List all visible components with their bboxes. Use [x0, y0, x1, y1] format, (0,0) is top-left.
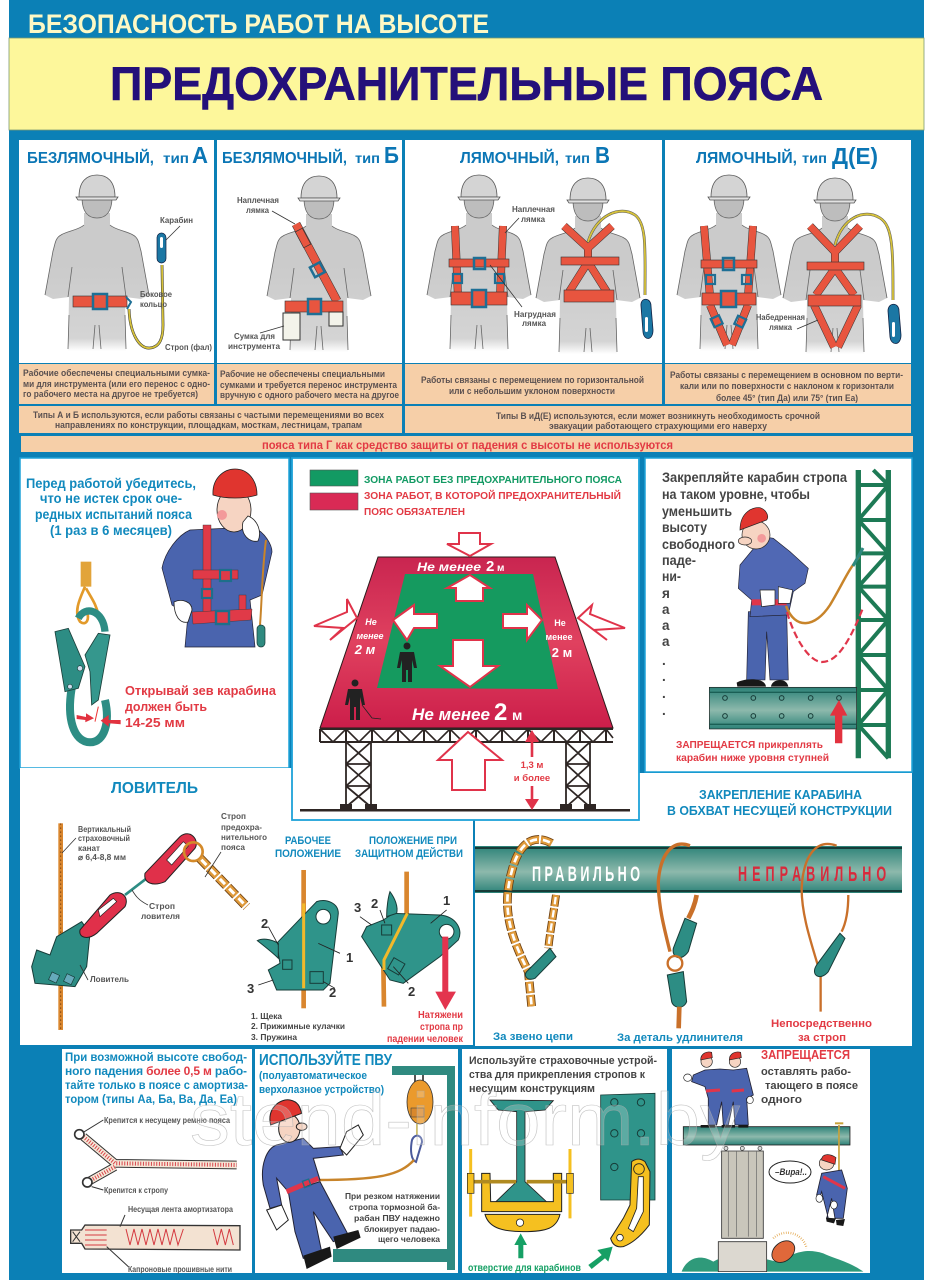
text: anchor level: а: [662, 618, 670, 633]
beam: ПРАВИЛЬНО: [532, 862, 640, 886]
device numbers: 2: [329, 985, 336, 1000]
labels: minimum 2 m: Не менее: [412, 705, 490, 724]
description boxes row 1: ми для инструмента (или его перенос с одно-: [23, 379, 210, 390]
falling worker: [262, 1100, 363, 1269]
labels: catcher diagram: страховочный: [78, 834, 130, 843]
text: safety devices: ства для прикрепления стропов к: [469, 1069, 645, 1081]
text: inspection reminder: Перед работой убедитесь,: [26, 476, 196, 491]
title band: ПРЕДОХРАНИТЕЛЬНЫЕ ПОЯСА: [110, 57, 823, 110]
legend: device parts: 2. Прижимные кулачки: [251, 1022, 345, 1031]
heading: type B: БЕЗЛЯМОЧНЫЙ,: [222, 149, 347, 167]
labels: absorber: [104, 1116, 234, 1274]
panel: use PVU: [255, 1049, 458, 1273]
icons: people in zones: [345, 642, 417, 720]
text: shock absorber: ного падения более 0,5 м рабо-: [65, 1064, 247, 1078]
diagram: protective position device: [360, 872, 460, 1010]
panel: type V: [405, 140, 662, 363]
labels: minimum 2 m: [354, 558, 573, 726]
heading: working position: ПОЛОЖЕНИЕ: [275, 848, 341, 860]
labels: type A: Строп (фал): [165, 343, 212, 352]
legend: device parts: [251, 1012, 345, 1042]
text: PVU braking: блокирует падаю-: [364, 1224, 440, 1234]
text: do not leave alone: ЗАПРЕЩАЕТСЯ: [761, 1048, 850, 1062]
description boxes row 2: эвакуации работающего страхующими его наверху: [549, 421, 768, 432]
text: PVU braking: щего человека: [378, 1234, 440, 1244]
labels: catcher diagram: нительного: [221, 833, 267, 842]
text: anchor level: уменьшить: [662, 504, 732, 519]
labels: type A: Карабин: [160, 216, 193, 225]
heading: type D(E): Д(Е): [832, 143, 878, 169]
text: carabiner gap: [125, 683, 277, 730]
labels: minimum 2 m: Не менее: [417, 560, 481, 574]
text: shock absorber: [65, 1050, 248, 1106]
text: inspection reminder: редных испытаний пояса: [35, 507, 192, 522]
legend: zones: ЗОНА РАБОТ, В КОТОРОЙ ПРЕДОХРАНИТЕЛЬНЫЙ: [364, 489, 621, 502]
labels: catcher diagram: Строп: [221, 812, 246, 821]
text: do not leave alone: тающего в поясе: [765, 1080, 858, 1092]
heading: type V: [460, 142, 610, 168]
heading: protective position: [355, 835, 463, 860]
watermark: stend-inform.by: [190, 1078, 740, 1161]
text: inspection reminder: [26, 476, 196, 538]
panel: type B: [217, 140, 402, 363]
text: anchor level: ни-: [662, 569, 681, 584]
captions: attachment: за строп: [798, 1032, 846, 1044]
dimension: height 1.3 m: и более: [514, 773, 550, 784]
worker standing on beam: [737, 508, 808, 687]
front figure with harness: [427, 175, 531, 351]
labels: catcher diagram: предохра-: [221, 823, 262, 832]
text: shock absorber: тайте только в поясе с амортиза-: [65, 1078, 248, 1092]
labels: minimum 2 m: м: [512, 707, 522, 723]
text: PVU braking: рабан ПВУ надежно: [354, 1213, 440, 1223]
heading: type A: А: [192, 142, 208, 168]
text: anchor level: паде-: [662, 553, 696, 568]
labels: type V: Нагрудная: [514, 310, 556, 319]
panel: type A: [19, 140, 214, 363]
back figure with harness and lanyard: [536, 178, 653, 354]
device numbers: 1: [346, 950, 353, 965]
subheading: PVU: верхолазное устройство): [259, 1084, 384, 1096]
text: shock absorber: тором (типы Аа, Ба, Ва, Да, Еа): [65, 1092, 237, 1106]
tower and beam: [709, 470, 888, 758]
heading: type V: ЛЯМОЧНЫЙ,: [460, 149, 559, 167]
description boxes row 1: более 45° (тип Да) или 75° (тип Еа): [716, 393, 858, 404]
caption: carabiner holes: отверстие для карабинов: [468, 1262, 581, 1274]
text: anchor level: Закрепляйте карабин стропа: [662, 470, 847, 485]
title band: [9, 38, 924, 130]
text: PVU braking: [345, 1191, 440, 1244]
panel: inspection reminder: [20, 458, 289, 768]
text: carabiner gap: 14-25 мм: [125, 715, 185, 730]
labels: type V: лямка: [521, 215, 546, 224]
description boxes row 2: Типы В иД(Е) используются, если может возникнуть необходимость срочной: [496, 411, 820, 422]
diagram: working position device: [257, 870, 340, 1008]
diagram: absorber y strap: [75, 1120, 237, 1190]
description boxes row 1: сумками и требуется перенос инструмента: [220, 380, 398, 391]
heading: type A: БЕЗЛЯМОЧНЫЙ,: [27, 149, 154, 167]
labels: type D(E): [756, 313, 818, 332]
legend: zones: ЗОНА РАБОТ БЕЗ ПРЕДОХРАНИТЕЛЬНОГО ПОЯСА: [364, 474, 622, 486]
description boxes row 1: или с небольшим уклоном поверхности: [449, 386, 615, 397]
description boxes row 2: Типы А и Б используются, если работы связаны с частыми перемещениями во всех: [33, 410, 385, 421]
device numbers: 3: [247, 981, 254, 996]
text: do not leave alone: оставлять рабо-: [761, 1066, 851, 1078]
hanging worker: [816, 1123, 847, 1226]
beam: НЕПРАВИЛЬНО: [738, 862, 886, 886]
carabiner with rope: [55, 562, 121, 742]
description boxes row 1: Работы связаны с перемещением в основном по верти-: [670, 370, 903, 381]
heading: wrapping: В ОБХВАТ НЕСУЩЕЙ КОНСТРУКЦИИ: [667, 803, 892, 818]
heading: type A: [27, 142, 208, 168]
device numbers: 2: [408, 984, 415, 999]
labels: type B: инструмента: [228, 342, 281, 351]
arrows: distance to edge: [314, 533, 625, 790]
labels: minimum 2 m: 2 м: [354, 642, 376, 657]
text: shock absorber: При возможной высоте свобод-: [65, 1050, 247, 1064]
labels: type D(E): лямка: [769, 323, 793, 332]
subheading: PVU: [259, 1070, 384, 1096]
labels: absorber: Крепится к стропу: [104, 1186, 169, 1195]
description boxes row 1: Рабочие обеспечены специальными сумка-: [23, 368, 210, 379]
panel: shock absorber: [62, 1049, 252, 1274]
text: forbidden attachment: ЗАПРЕЩАЕТСЯ прикреплять: [676, 739, 824, 751]
text: anchor level: .: [662, 653, 666, 668]
speech bubble: –Вира!..: [775, 1167, 807, 1177]
heading: catcher: ЛОВИТЕЛЬ: [111, 780, 198, 797]
text: forbidden attachment: карабин ниже уровня ступней: [676, 752, 829, 764]
heading: type D(E): ЛЯМОЧНЫЙ,: [696, 149, 797, 167]
worker checking harness: [162, 469, 272, 647]
text: safety devices: несущим конструкциям: [469, 1083, 595, 1095]
labels: minimum 2 m: Не: [554, 618, 566, 628]
panel: anchor level: [645, 458, 912, 772]
labels: minimum 2 m: менее: [356, 631, 384, 641]
labels: catcher diagram: ⌀ 6,4-8,8 мм: [78, 853, 126, 862]
labels: minimum 2 m: менее: [545, 632, 573, 642]
labels: type B: лямка: [246, 206, 270, 215]
text: safety devices: [469, 1055, 657, 1095]
labels: minimum 2 m: 2: [494, 699, 507, 726]
labels: type A: Боковое: [140, 290, 173, 299]
diagram: absorber band: [71, 1215, 240, 1267]
dimension: height 1.3 m: [514, 730, 550, 810]
description boxes row 2: направлениях по конструкции, площадкам, мосткам, лестницам, трапам: [55, 420, 362, 431]
text: anchor level: свободного: [662, 537, 735, 552]
labels: minimum 2 m: 2 м: [552, 645, 572, 660]
text: anchor level: я: [662, 586, 670, 601]
labels: absorber: Крепится к несущему ремню пояса: [104, 1116, 231, 1125]
text: safety devices: Используйте страховочные устрой-: [469, 1055, 657, 1067]
labels: type A: кольцо: [140, 300, 167, 309]
text: inspection reminder: что не истек срок оче-: [40, 491, 182, 506]
labels: type B: Сумка для: [234, 332, 275, 341]
description boxes row 1: вручную с одного рабочего места на другое: [220, 390, 399, 401]
description boxes row 1: [19, 364, 911, 404]
text: forbidden attachment: [676, 739, 829, 764]
subtitle: БЕЗОПАСНОСТЬ РАБОТ НА ВЫСОТЕ: [28, 9, 489, 39]
description boxes row 1: го рабочего места на другое не требуется): [23, 389, 198, 400]
labels: catcher diagram: Вертикальный: [78, 825, 131, 834]
extender correct: [658, 844, 697, 1028]
device numbers: [247, 893, 450, 1000]
text: anchor level: .: [662, 669, 666, 684]
warning strip: пояса типа Г как средство защиты от падения с высоты не используются: [262, 438, 673, 452]
labels: type V: лямка: [522, 319, 547, 328]
captions: attachment: [493, 1018, 872, 1044]
panel: wrapping carabiner around structure: [475, 773, 912, 1046]
labels: absorber: Капроновые прошивные нити: [128, 1265, 232, 1274]
lanyard: correct and incorrect: [786, 548, 863, 662]
panel: type D(E): [665, 140, 911, 363]
description boxes row 1: Работы связаны с перемещением по горизонтальной: [421, 375, 644, 386]
labels: catcher diagram: пояса: [221, 843, 246, 852]
labels: minimum 2 m: 2: [486, 558, 494, 575]
labels: type V: Наплечная: [512, 205, 555, 214]
text: rope tension: стропа пр: [420, 1022, 463, 1033]
heading: type B: [222, 142, 399, 168]
warning strip: [21, 436, 913, 452]
device numbers: 3: [354, 900, 361, 915]
heading: type B: Б: [384, 142, 399, 168]
labels: type D(E): Набедренная: [756, 313, 805, 322]
labels: type A: [140, 216, 212, 352]
structure and device: [317, 1066, 455, 1270]
description boxes row 2: [19, 406, 911, 433]
text: anchor level: .: [662, 686, 666, 701]
beam: [475, 846, 902, 893]
heading: type V: тип: [565, 150, 590, 166]
back figure with full harness and lanyard: [783, 178, 901, 354]
heading: type B: тип: [355, 150, 380, 166]
text: inspection reminder: (1 раз в 6 месяцев): [50, 523, 172, 538]
figure with shoulder strap and tool bag: [267, 176, 371, 352]
heading: type A: тип: [163, 150, 189, 166]
labels: catcher diagram: ловителя: [141, 912, 180, 921]
text: PVU braking: При резком натяжении: [345, 1191, 440, 1201]
text: anchor level: а: [662, 634, 670, 649]
heading: working position: РАБОЧЕЕ: [285, 835, 331, 847]
device numbers: 1: [443, 893, 450, 908]
legend: device parts: 3. Пружина: [251, 1033, 298, 1042]
text: carabiner gap: Открывай зев карабина: [125, 683, 277, 698]
diagram: catcher on rope: [32, 823, 247, 1030]
text: anchor level: высоту: [662, 520, 707, 535]
heading: working position: [275, 835, 341, 860]
text: anchor level: на таком уровне, чтобы: [662, 487, 810, 502]
labels: type B: Наплечная: [237, 196, 279, 205]
labels: catcher diagram: Строп: [149, 902, 175, 911]
labels: absorber: Несущая лента амортизатора: [128, 1205, 234, 1214]
text: rope tension: Натяжени: [418, 1010, 463, 1021]
panel: lower left catcher device: [20, 768, 473, 1045]
labels: catcher diagram: Ловитель: [90, 975, 129, 984]
text: rope tension: падении человек: [387, 1034, 464, 1045]
labels: catcher diagram: [62, 812, 267, 984]
text: anchor level: а: [662, 602, 670, 617]
legend: zones: [310, 470, 622, 518]
front figure with full harness: [677, 175, 781, 351]
device numbers: 2: [261, 916, 268, 931]
legend: device parts: 1. Щека: [251, 1012, 283, 1021]
beam, column and sea: [682, 1127, 863, 1272]
labels: type V: [490, 205, 556, 328]
text: do not leave alone: [761, 1048, 858, 1106]
text: PVU braking: стропа тормозной ба-: [349, 1202, 440, 1212]
panel: do not leave alone: [672, 1048, 870, 1273]
heading: wrapping: [667, 788, 892, 818]
text: do not leave alone: одного: [761, 1094, 802, 1106]
figure with belt: [45, 175, 166, 351]
labels: minimum 2 m: м: [497, 563, 504, 574]
description boxes row 1: Рабочие не обеспечены специальными: [220, 369, 385, 380]
chain correct: [507, 839, 556, 1007]
labels: minimum 2 m: Не: [365, 617, 377, 627]
two workers on beam: [684, 1052, 753, 1128]
labels: type B: [228, 196, 295, 351]
captions: attachment: Непосредственно: [771, 1018, 872, 1030]
captions: attachment: За деталь удлинителя: [617, 1032, 743, 1044]
dimension: height 1.3 m: 1,3 м: [521, 760, 543, 771]
panel: safety devices: [462, 1049, 667, 1274]
device numbers: 2: [371, 896, 378, 911]
subheading: PVU: (полуавтоматическое: [259, 1070, 367, 1082]
description boxes row 1: кали или по поверхности с наклоном к горизонтали: [680, 381, 894, 392]
heading: type D(E): тип: [802, 150, 827, 166]
text: anchor level: .: [662, 703, 666, 718]
heading: use PVU: ИСПОЛЬЗУЙТЕ ПВУ: [259, 1050, 393, 1069]
rope incorrect: [802, 844, 848, 1012]
heading: wrapping: ЗАКРЕПЛЕНИЕ КАРАБИНА: [699, 788, 862, 802]
legend: zones: ПОЯС ОБЯЗАТЕЛЕН: [364, 506, 465, 518]
text: rope tension: [387, 1010, 464, 1045]
text: anchor level: [662, 470, 847, 718]
heading: protective position: ПОЛОЖЕНИЕ ПРИ: [369, 835, 457, 847]
plate and hook: [588, 1093, 655, 1269]
clamp on I-beam: [467, 1100, 573, 1258]
diagram: scaffold platform: [300, 557, 630, 812]
speech bubble: [769, 1161, 811, 1183]
captions: attachment: За звено цепи: [493, 1031, 573, 1043]
panel: work zones: [292, 458, 639, 820]
text: carabiner gap: должен быть: [125, 699, 207, 714]
heading: type D(E): [696, 143, 878, 169]
heading: type V: В: [595, 142, 610, 168]
labels: catcher diagram: канат: [78, 844, 100, 853]
heading: protective position: ЗАЩИТНОМ ДЕЙСТВИ: [355, 847, 463, 860]
